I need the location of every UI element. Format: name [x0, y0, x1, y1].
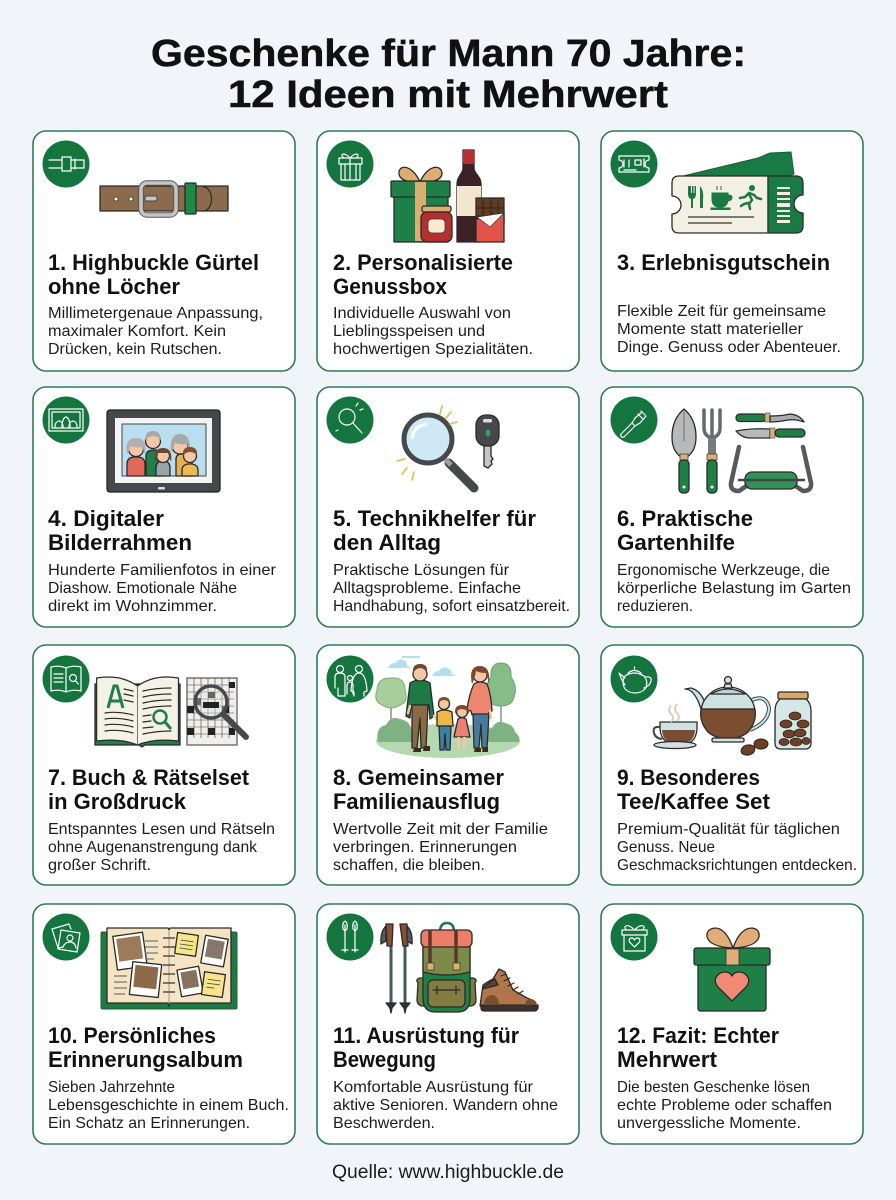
description: körperliche Belastung im Garten — [617, 580, 851, 597]
heading: 3. Erlebnisgutschein — [617, 250, 830, 275]
heading: Familienausflug — [333, 789, 500, 814]
source line: Quelle: www.highbuckle.de — [332, 1162, 564, 1183]
title: 12 Ideen mit Mehrwert — [228, 74, 668, 116]
icon: family badge — [326, 656, 374, 702]
illustration: family walking in the park — [376, 656, 520, 758]
illustration: scrapbook album — [101, 928, 237, 1009]
heading: 11. Ausrüstung für — [333, 1023, 519, 1048]
panel: 5 Technikhelfer — [317, 387, 579, 627]
illustration: backpack — [417, 923, 476, 1012]
heading — [48, 506, 192, 555]
description — [617, 1079, 832, 1132]
description: Lebensgeschichte in einem Buch. — [48, 1097, 289, 1114]
heading — [617, 765, 771, 814]
description — [617, 303, 841, 356]
description: Momente statt materieller — [617, 321, 804, 338]
description — [333, 1079, 558, 1132]
heading — [48, 765, 250, 814]
heading: den Alltag — [333, 530, 441, 555]
description: aktive Senioren. Wandern ohne — [333, 1097, 558, 1114]
description — [48, 305, 263, 358]
panel: 1 Highbuckle Gürtel — [33, 131, 295, 371]
icon: book badge — [42, 656, 90, 702]
description: ohne Augenanstrengung dank — [48, 839, 258, 856]
description: Praktische Lösungen für — [333, 562, 510, 579]
heading: Bilderrahmen — [48, 530, 192, 555]
panel: 7 Buch & Rätselset — [33, 645, 295, 885]
description: schaffen, die bleiben. — [333, 857, 485, 874]
heading — [333, 765, 504, 814]
heading: 4. Digitaler — [48, 506, 164, 531]
panel: 8 Familienausflug — [317, 645, 579, 885]
description: Alltagsprobleme. Einfache — [333, 580, 521, 597]
heading: 7. Buch & Rätselset — [48, 765, 250, 790]
heading: 6. Praktische — [617, 506, 753, 531]
heading: Mehrwert — [617, 1047, 718, 1072]
heading: 5. Technikhelfer für — [333, 506, 536, 531]
icon: magnifier badge — [326, 396, 374, 444]
icon: garden fork badge — [610, 396, 658, 444]
description: Hunderte Familienfotos in einer — [48, 562, 277, 579]
description — [617, 562, 851, 615]
description — [333, 562, 570, 615]
title — [151, 33, 746, 116]
description: Sieben Jahrzehnte — [48, 1079, 175, 1096]
panel: 2 Personalisierte Genussbox — [317, 131, 579, 371]
panel: 6 Gartenhilfe — [601, 387, 863, 627]
description: Millimetergenaue Anpassung, — [48, 305, 263, 322]
icon: voucher badge — [610, 140, 658, 188]
icon: trekking poles badge — [326, 914, 374, 960]
illustration: crossword with magnifier — [187, 678, 246, 745]
panel: 4 Digitaler Bilderrahmen — [33, 387, 295, 627]
description — [333, 821, 548, 874]
icon: picture frame badge — [42, 396, 90, 444]
illustration: hiking boot — [480, 969, 538, 1011]
heading: 10. Persönliches — [48, 1023, 216, 1048]
panel: 12 Fazit — [601, 904, 863, 1144]
description — [48, 562, 277, 615]
panel: 3 Erlebnisgutschein — [601, 131, 863, 371]
heading — [333, 506, 536, 555]
heading — [617, 1023, 779, 1072]
description: Genuss. Neue — [617, 839, 715, 856]
description: reduzieren. — [617, 598, 693, 615]
icon: gift badge — [326, 140, 374, 188]
description: Die besten Geschenke lösen — [617, 1079, 810, 1096]
panel: 10 Erinnerungsalbum — [33, 904, 295, 1144]
heading: in Großdruck — [48, 789, 187, 814]
illustration: large-print book — [95, 677, 180, 747]
heading: 2. Personalisierte — [333, 250, 513, 275]
illustration: experience ticket — [672, 152, 803, 233]
description — [48, 1079, 289, 1132]
panel: 9 Tee/Kaffee Set — [601, 645, 863, 885]
heading: Tee/Kaffee Set — [617, 789, 771, 814]
illustration: digital photo frame with family — [107, 410, 220, 492]
description: verbringen. Erinnerungen — [333, 839, 517, 856]
panel: 11 Ausrüstung für Bewegung — [317, 904, 579, 1144]
heading: 9. Besonderes — [617, 765, 760, 790]
description: Drücken, kein Rutschen. — [48, 341, 222, 358]
heading: Erinnerungsalbum — [48, 1047, 243, 1072]
icon: gift with heart badge — [610, 914, 658, 960]
icon: teapot badge — [610, 656, 658, 702]
heading — [48, 250, 259, 299]
illustration: garden tools and kneeler — [672, 409, 811, 493]
description: Komfortable Ausrüstung für — [333, 1079, 534, 1096]
heading: Gartenhilfe — [617, 530, 735, 555]
description: hochwertigen Spezialitäten. — [333, 341, 533, 358]
description: direkt im Wohnzimmer. — [48, 598, 217, 615]
description: Flexible Zeit für gemeinsame — [617, 303, 826, 320]
description: Handhabung, sofort einsatzbereit. — [333, 598, 570, 615]
description: Diashow. Emotionale Nähe — [48, 580, 237, 597]
heading — [48, 1023, 243, 1072]
heading — [617, 506, 753, 555]
description: Beschwerden. — [333, 1115, 435, 1132]
description: Ein Schatz an Erinnerungen. — [48, 1115, 250, 1132]
description: unvergessliche Momente. — [617, 1115, 801, 1132]
heading — [333, 1023, 519, 1072]
description: maximaler Komfort. Kein — [48, 323, 226, 340]
illustration: trekking poles — [381, 924, 412, 1013]
illustration: gift box, jar, wine, chocolate — [391, 150, 504, 242]
description: Lieblingsspeisen und — [333, 323, 485, 340]
description — [333, 305, 533, 358]
illustration: belt with buckle — [100, 183, 228, 215]
illustration: magnifying glass and car key — [397, 406, 499, 488]
heading: 1. Highbuckle Gürtel — [48, 250, 259, 275]
heading — [333, 250, 513, 299]
icon: belt badge — [42, 140, 90, 188]
description: Premium-Qualität für täglichen — [617, 821, 840, 838]
heading: Genussbox — [333, 274, 448, 299]
description: Ergonomische Werkzeuge, die — [617, 562, 830, 579]
description: Individuelle Auswahl von — [333, 305, 511, 322]
illustration: teapot, cup and coffee jar — [654, 676, 811, 757]
description — [48, 821, 275, 874]
heading: ohne Löcher — [48, 274, 180, 299]
description: Entspanntes Lesen und Rätseln — [48, 821, 275, 838]
description: Wertvolle Zeit mit der Familie — [333, 821, 548, 838]
description: Dinge. Genuss oder Abenteuer. — [617, 339, 841, 356]
description: großer Schrift. — [48, 857, 151, 874]
description — [617, 821, 857, 874]
description: echte Probleme oder schaffen — [617, 1097, 832, 1114]
heading: 8. Gemeinsamer — [333, 765, 504, 790]
heading: Bewegung — [333, 1047, 436, 1072]
description: Geschmacksrichtungen entdecken. — [617, 857, 857, 874]
title: Geschenke für Mann 70 Jahre: — [151, 33, 746, 75]
illustration: gift with heart — [694, 928, 770, 1011]
icon: photos badge — [42, 914, 90, 960]
heading: 12. Fazit: Echter — [617, 1023, 779, 1048]
